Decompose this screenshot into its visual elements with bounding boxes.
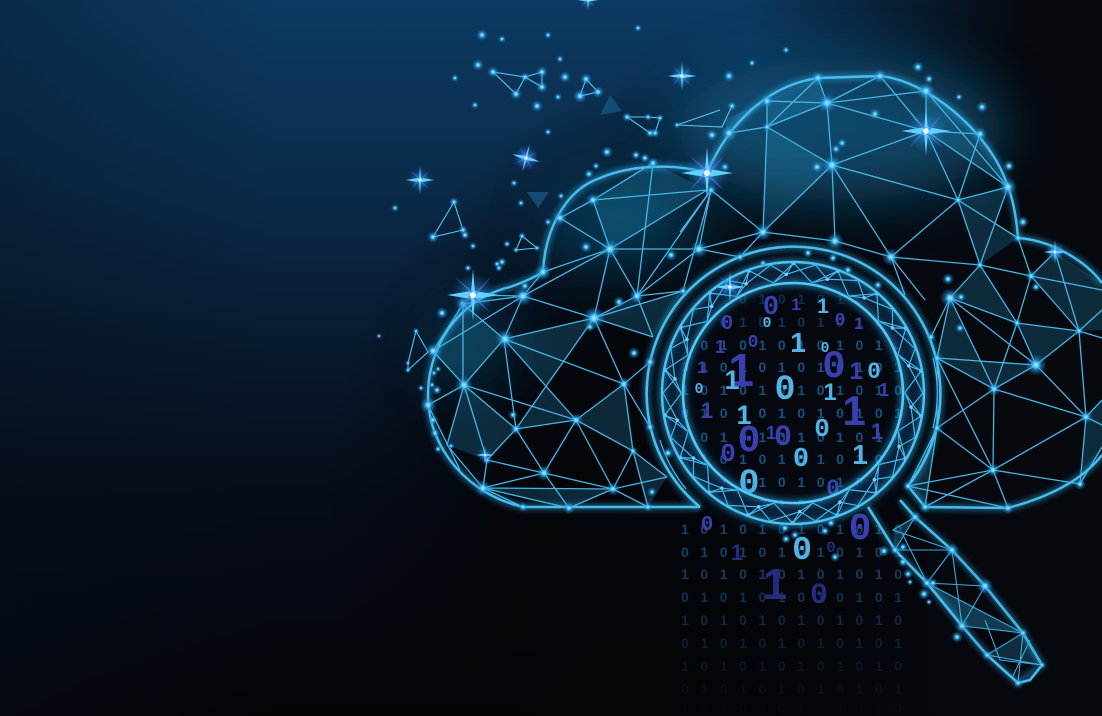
- binary grid fading below lens: 101010101010: [681, 612, 914, 628]
- highlighted binary digits: [694, 293, 889, 613]
- highlighted binary digits: 0: [701, 514, 713, 537]
- highlighted binary digits: 0: [721, 313, 733, 336]
- highlighted binary digits: 0: [835, 311, 845, 331]
- binary grid fading below lens: 010101010101: [681, 589, 914, 605]
- mesh nodes: [404, 66, 1093, 688]
- binary grid inside lens: [681, 291, 914, 512]
- highlighted binary digits: 0: [826, 539, 836, 557]
- binary grid fading below lens: 101010101010: [681, 658, 914, 674]
- highlighted binary digits: 0: [694, 381, 704, 398]
- faded triangles: [527, 95, 622, 208]
- highlighted binary digits: 1: [697, 358, 707, 377]
- highlighted binary digits: 1: [701, 398, 713, 423]
- highlighted binary digits: 0: [867, 359, 881, 385]
- highlighted binary digits: 1: [849, 358, 863, 385]
- cloud mesh lines: [428, 76, 1102, 508]
- binary grid fading below lens: [681, 521, 914, 716]
- highlighted binary digits: 1: [766, 423, 776, 443]
- magnifier: lens lattice band: [656, 257, 930, 529]
- highlighted binary digits: 0: [738, 464, 760, 504]
- highlighted binary digits: 1: [817, 295, 829, 318]
- highlighted binary digits: 1: [871, 419, 883, 444]
- binary grid inside lens: 010101010101: [681, 405, 914, 421]
- highlighted binary digits: 1: [854, 314, 864, 333]
- binary grid inside lens: 101010101010: [681, 382, 914, 398]
- highlighted binary digits: 0: [849, 508, 871, 551]
- highlighted binary digits: 1: [763, 560, 787, 609]
- highlighted binary digits: 1: [736, 400, 752, 430]
- binary grid fading below lens: 101010101010: [681, 700, 914, 716]
- highlighted binary digits: 1: [715, 337, 725, 357]
- binary grid inside lens: 010101010101: [681, 359, 914, 375]
- magnifier: dark lens interior: [645, 246, 937, 538]
- highlighted binary digits: 0: [822, 345, 846, 389]
- binary grid fading below lens: 010101010101: [681, 544, 914, 560]
- mesh: top lobe: [680, 76, 1102, 331]
- highlighted binary digits: 0: [720, 439, 736, 469]
- binary grid inside lens: 010101010101: [681, 451, 914, 467]
- binary grid fading below lens: 101010101010: [681, 521, 914, 537]
- highlighted binary digits: 0: [814, 414, 830, 444]
- highlighted binary digits: 1: [731, 540, 743, 565]
- highlighted binary digits: 1: [823, 379, 837, 406]
- highlighted binary digits: 1: [842, 387, 866, 434]
- binary grid inside lens: 010101010101: [681, 496, 914, 512]
- translucent cloud facets: [433, 78, 1102, 508]
- highlighted binary digits: 0: [738, 420, 760, 463]
- highlighted binary digits: 0: [774, 370, 796, 410]
- binary grid inside lens: 010101010101: [681, 314, 914, 330]
- binary grid fading below lens: 101010101010: [681, 566, 914, 582]
- cloud ambient glow: [430, 60, 1005, 385]
- binary grid fading below lens: 010101010101: [681, 635, 914, 651]
- highlighted binary digits: 0: [762, 315, 772, 332]
- highlighted binary digits: 0: [792, 532, 812, 569]
- mesh: right lobe: [908, 276, 1102, 508]
- highlighted binary digits: 1: [791, 295, 801, 314]
- binary grid inside lens: 101010101010: [681, 474, 914, 490]
- highlighted binary digits: 1: [728, 344, 754, 396]
- highlighted binary digits: 0: [748, 333, 758, 353]
- scattered light particles: [376, 24, 1041, 643]
- binary grid inside lens: 101010101010: [681, 291, 914, 307]
- highlighted binary digits: 1: [852, 439, 868, 470]
- highlighted binary digits: 1: [790, 327, 806, 358]
- highlighted binary digits: 0: [774, 421, 792, 455]
- binary grid inside lens: 101010101010: [681, 429, 914, 445]
- magnifier: outer ring: [647, 247, 940, 507]
- highlighted binary digits: 0: [793, 445, 809, 475]
- magnifier: handle: [868, 500, 1042, 683]
- highlighted binary digits: 0: [810, 579, 828, 613]
- floating constellations: [408, 72, 732, 370]
- sparkle stars: [406, 0, 1067, 464]
- highlighted binary digits: 1: [724, 365, 740, 395]
- highlighted binary digits: 0: [826, 476, 840, 502]
- cloud outline glow: [428, 76, 1102, 508]
- highlighted binary digits: 0: [763, 293, 779, 323]
- highlighted binary digits: 1: [879, 380, 889, 400]
- binary grid fading below lens: 010101010101: [681, 681, 914, 697]
- binary grid inside lens: 101010101010: [681, 337, 914, 353]
- mesh: left lobes: [428, 163, 711, 508]
- highlighted binary digits: 0: [820, 340, 830, 357]
- cloud outline: [428, 76, 1102, 508]
